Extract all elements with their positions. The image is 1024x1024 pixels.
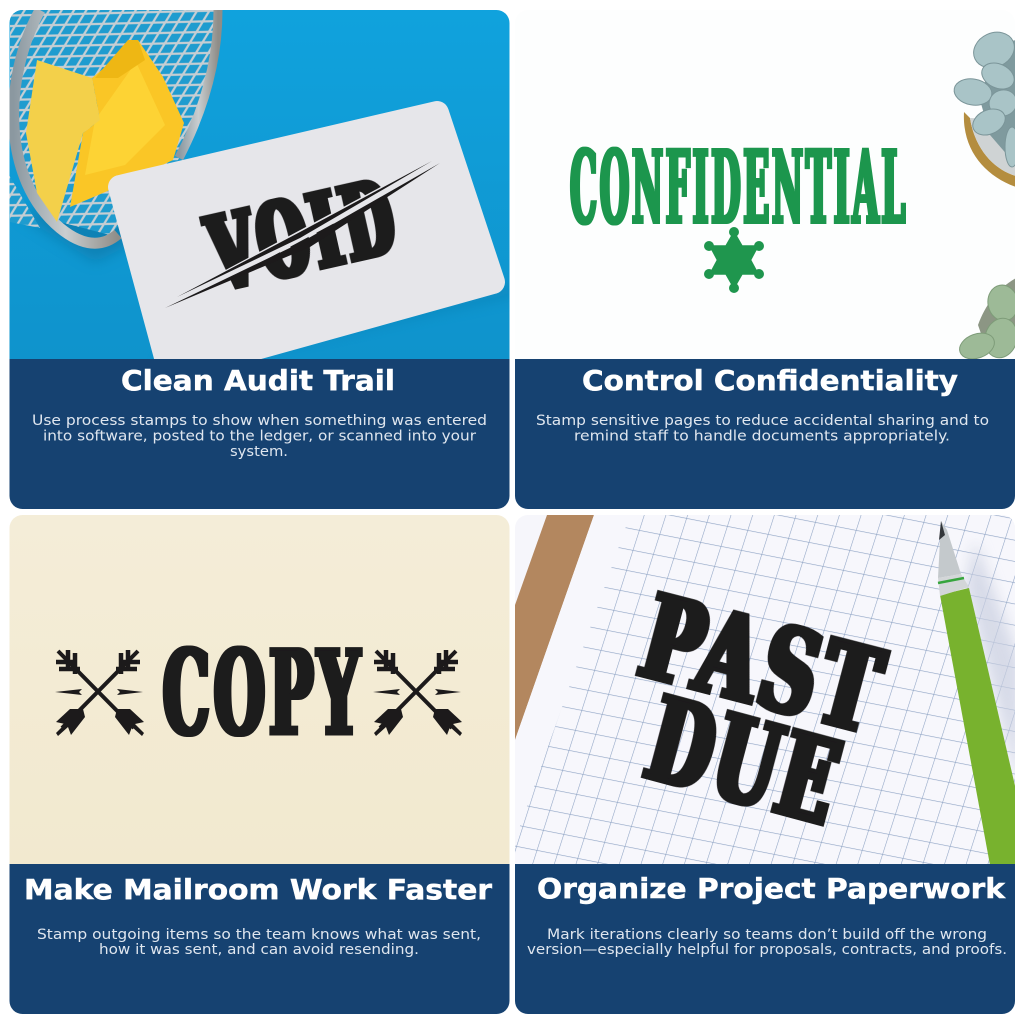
- caption panel: [9, 359, 510, 510]
- body text: system.: [230, 444, 288, 460]
- icon: sheriff star: [704, 227, 764, 293]
- body text: how it was sent, and can avoid resending.: [99, 942, 419, 958]
- body text: [527, 927, 1007, 958]
- icon: crumpled yellow paper: [26, 40, 184, 222]
- photo: past due stamp on grid paper: [515, 515, 1020, 865]
- photo: copy stamp on cream paper: [9, 515, 510, 865]
- panel: control confidentiality: [515, 10, 1022, 510]
- panel: make mailroom work faster: [9, 515, 510, 1015]
- icon: crossed arrows right: [373, 650, 462, 736]
- grid paper: [515, 515, 1020, 865]
- caption panel: [9, 864, 510, 1015]
- body text: into software, posted to the ledger, or scanned into your: [43, 428, 476, 444]
- body text: Use process stamps to show when something was entered: [32, 413, 487, 429]
- icon: succulent top: [954, 32, 1015, 187]
- panel: clean audit trail: [9, 10, 515, 510]
- heading: Clean Audit Trail: [121, 364, 395, 397]
- body text: [32, 413, 487, 460]
- photo: void card on blue background: [9, 10, 515, 372]
- heading: Organize Project Paperwork: [537, 872, 1006, 905]
- icon: green pen: [938, 521, 1016, 865]
- body text: Stamp sensitive pages to reduce accidental sharing and to: [536, 413, 989, 429]
- stamp: PAST: PAST: [629, 570, 899, 762]
- body text: [37, 927, 481, 958]
- icon: succulent bottom: [959, 278, 1015, 359]
- stamp: VOID: VOID: [198, 156, 411, 316]
- body text: Stamp outgoing items so the team knows what was sent,: [37, 927, 481, 943]
- stamp: VOID: [165, 156, 440, 316]
- photo: copy stamp on cream paper: COPY: [163, 624, 364, 762]
- body text: version—especially helpful for proposals, contracts, and proofs.: [527, 942, 1007, 958]
- caption panel: [515, 359, 1015, 510]
- body text: [536, 413, 989, 444]
- icon: white card: [120, 113, 493, 372]
- stamp: DUE: DUE: [635, 672, 856, 853]
- body text: Mark iterations clearly so teams don’t build off the wrong: [547, 927, 987, 943]
- caption panel: [515, 864, 1015, 1015]
- photo: confidential stamp on white: [570, 32, 1015, 359]
- panel: organize project paperwork: [515, 515, 1020, 1015]
- icon: wire mesh basket: [9, 10, 222, 243]
- heading: Make Mailroom Work Faster: [24, 873, 492, 906]
- icon: crossed arrows left: [55, 650, 144, 736]
- heading: Control Confidentiality: [582, 364, 958, 397]
- body text: remind staff to handle documents appropriately.: [574, 428, 950, 444]
- icon: kraft envelope: [515, 515, 594, 740]
